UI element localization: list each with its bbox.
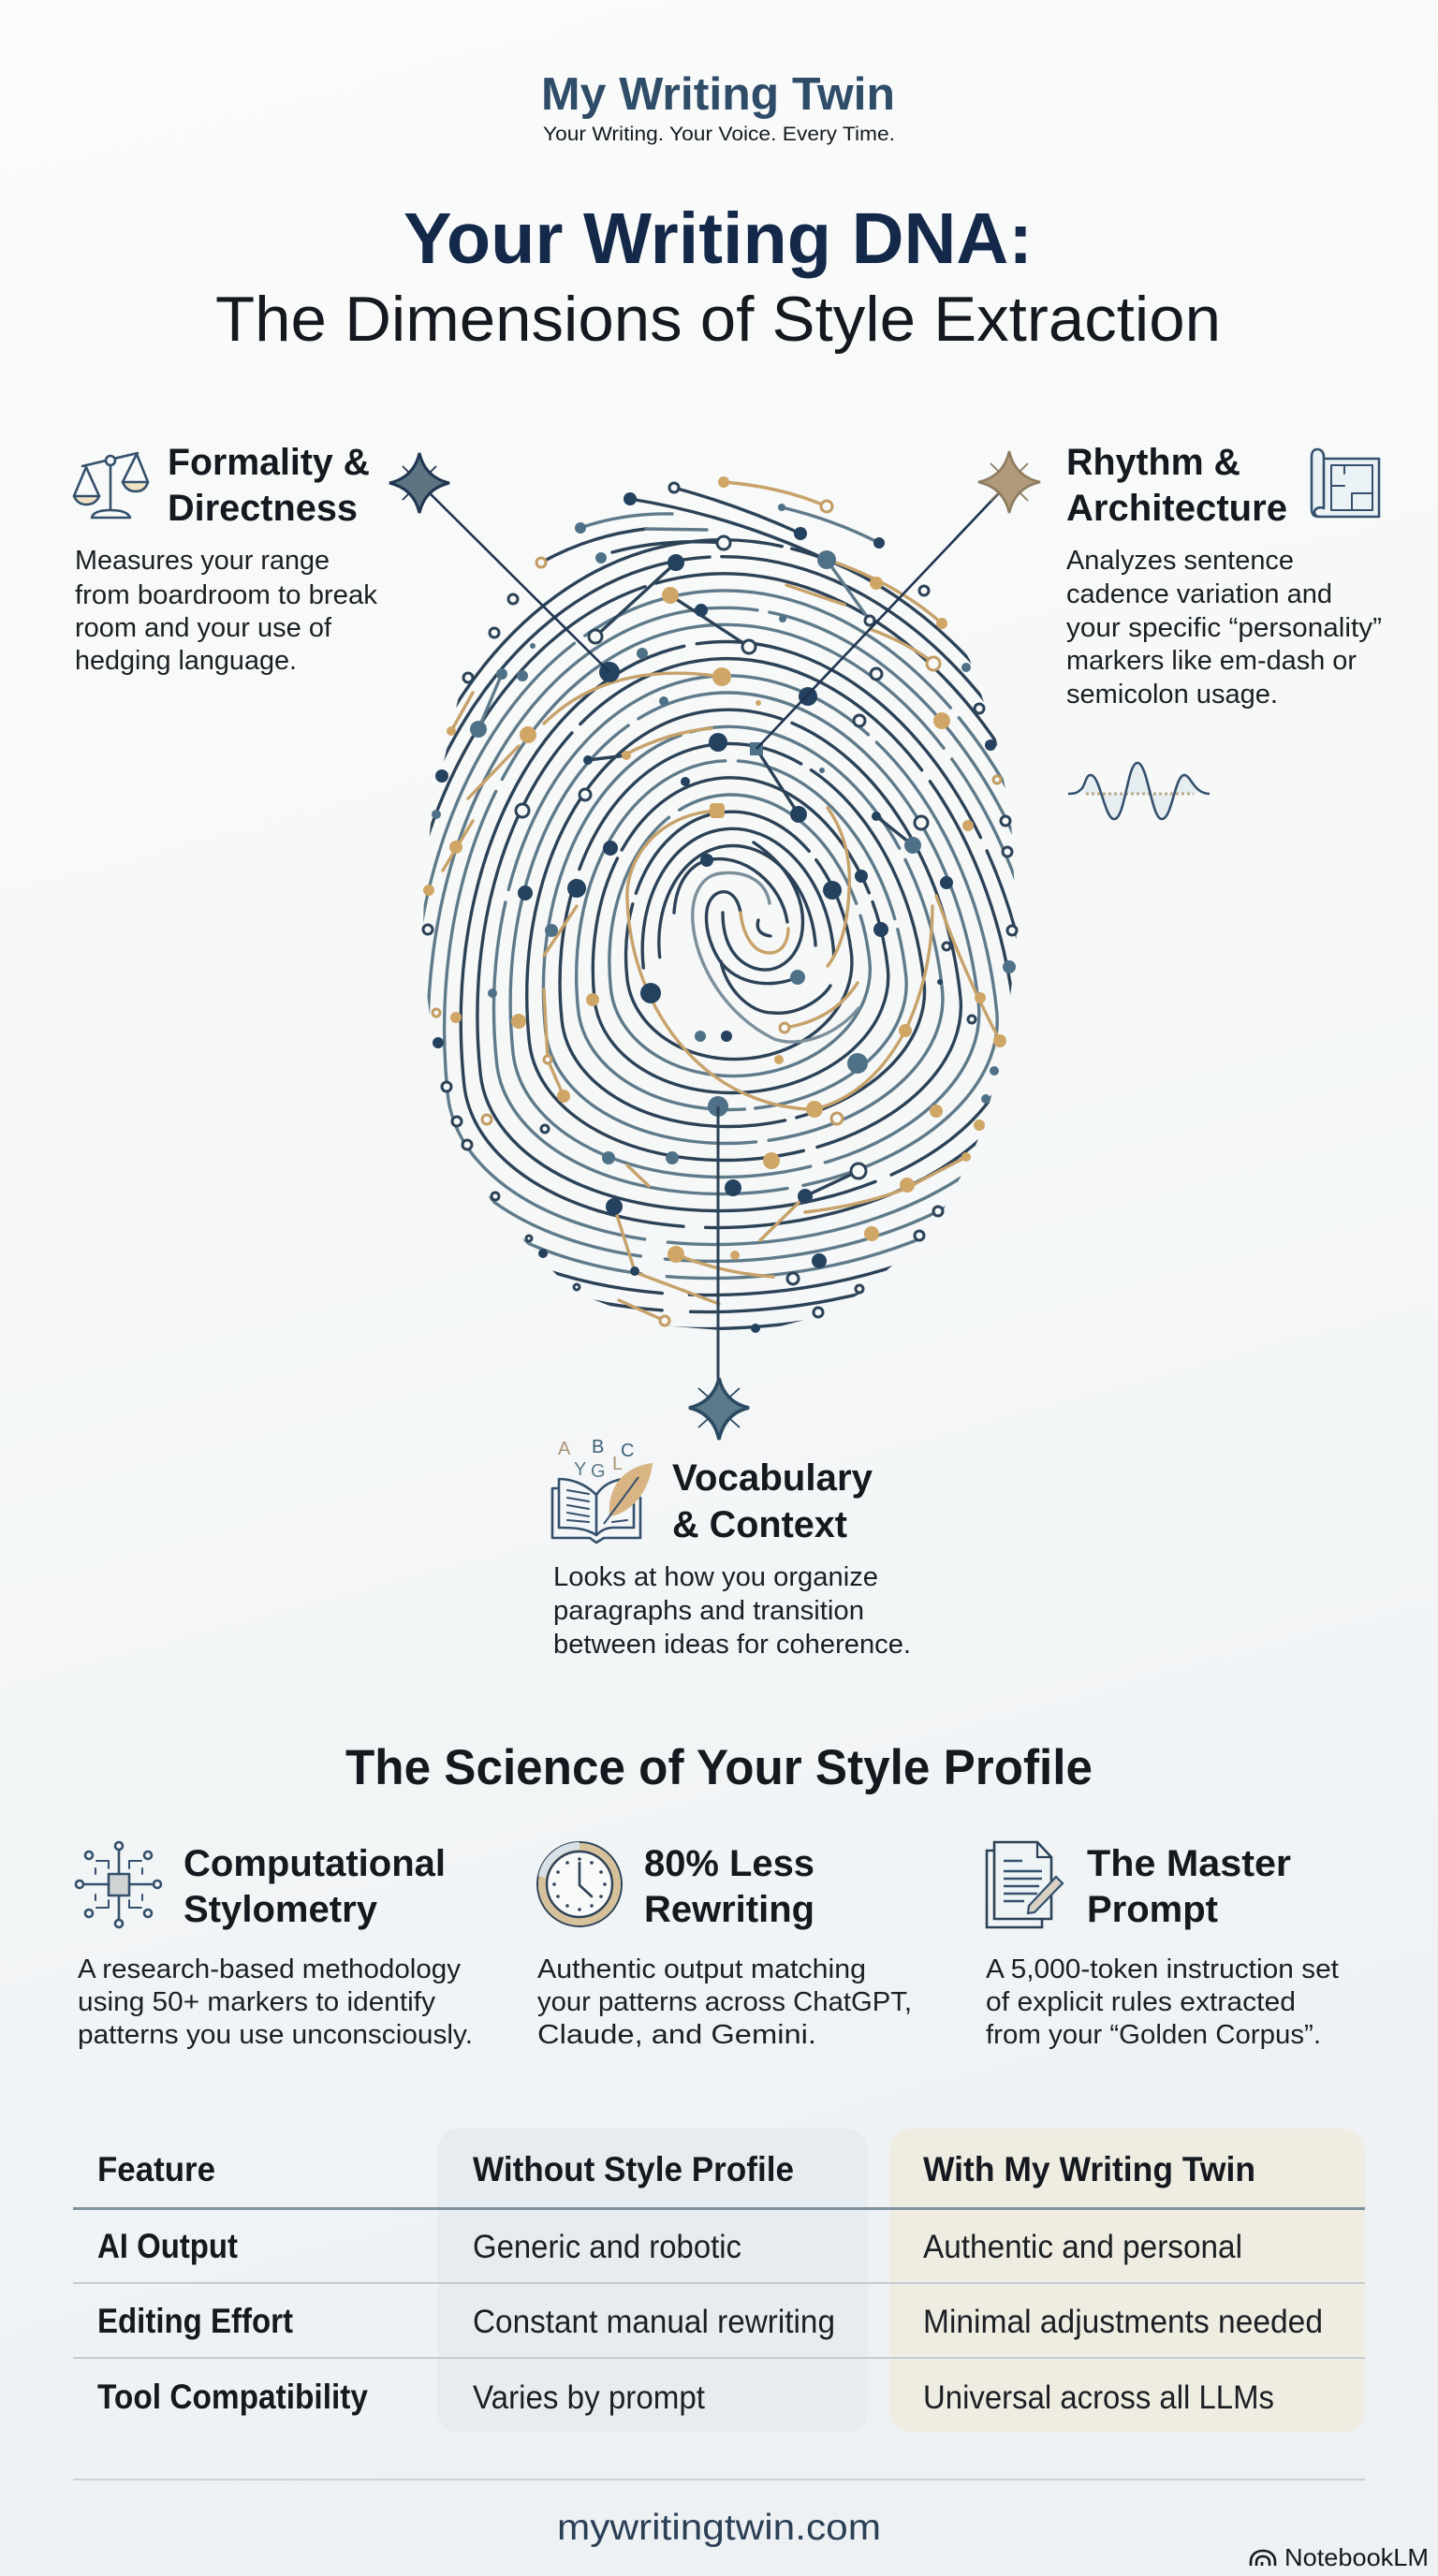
description: room and your use of (75, 613, 332, 643)
description: your specific “personality” (1066, 613, 1382, 643)
arrow: star to formality (389, 453, 609, 672)
heading: Architecture (1066, 488, 1287, 529)
panel: formality and directness (74, 442, 377, 676)
footer url: mywritingtwin.com (557, 2508, 881, 2548)
notebooklm badge: NotebookLM (1284, 2543, 1429, 2571)
icon: clock (537, 1842, 622, 1926)
column panel: with my writing twin (889, 2129, 1365, 2433)
description: Looks at how you organize (553, 1562, 878, 1592)
description: paragraphs and transition (553, 1596, 864, 1626)
icon: open book with quill and letters: L (612, 1454, 623, 1474)
description: semicolon usage. (1066, 680, 1278, 710)
heading (1087, 1843, 1291, 1930)
icon: open book with quill and letters: G (591, 1461, 606, 1482)
fingerprint nodes (423, 476, 1017, 1333)
panel: rhythm and architecture (1066, 442, 1382, 819)
row: tool compatibility: Tool Compatibility (97, 2378, 368, 2416)
section heading: The Science of Your Style Profile (345, 1740, 1093, 1795)
description: Claude, and Gemini. (537, 2020, 816, 2050)
table header row: With My Writing Twin (923, 2150, 1255, 2188)
column panel: without style profile (437, 2129, 868, 2433)
icon: waveform (1068, 763, 1210, 819)
heading: Rhythm & (1066, 442, 1240, 483)
row: editing effort: Editing Effort (97, 2302, 293, 2340)
description (75, 546, 377, 676)
description: A research-based methodology (78, 1954, 461, 1984)
heading (644, 1843, 814, 1930)
heading (168, 442, 370, 529)
table header row (97, 2150, 1255, 2188)
description: between ideas for coherence. (553, 1630, 911, 1660)
title (215, 198, 1221, 355)
row: ai output (97, 2227, 1242, 2265)
comparison table (73, 2129, 1365, 2433)
heading: Prompt (1087, 1889, 1218, 1930)
description (78, 1954, 473, 2050)
spiral core and top ridges (541, 482, 879, 1042)
heading: The Master (1087, 1843, 1291, 1884)
heading: Vocabulary (672, 1457, 873, 1499)
row: editing effort (97, 2302, 1323, 2340)
icon: open book with quill and letters: C (621, 1441, 634, 1461)
row: editing effort: Minimal adjustments needed (923, 2304, 1323, 2340)
tan ridges and connectors (443, 560, 999, 1321)
row: ai output: Generic and robotic (473, 2229, 741, 2265)
fingerprint illustration (421, 476, 1019, 1333)
description (986, 1954, 1339, 2050)
icon: open book with quill and letters: Y (574, 1459, 586, 1480)
row: tool compatibility: Varies by prompt (473, 2379, 705, 2416)
description: hedging language. (75, 646, 297, 676)
heading (672, 1457, 873, 1545)
heading (183, 1843, 446, 1930)
description: A 5,000-token instruction set (986, 1954, 1339, 1984)
table header row: Without Style Profile (473, 2150, 794, 2188)
row: tool compatibility: Universal across all LLMs (923, 2379, 1274, 2416)
title: The Dimensions of Style Extraction (215, 284, 1221, 355)
description: of explicit rules extracted (986, 1987, 1296, 2017)
description: Analyzes sentence (1066, 546, 1294, 576)
heading: Directness (168, 488, 358, 529)
row: tool compatibility (97, 2378, 1274, 2416)
panel: computational stylometry (76, 1842, 473, 2050)
panel: the master prompt (986, 1842, 1339, 2050)
description: from your “Golden Corpus”. (986, 2020, 1321, 2050)
description: using 50+ markers to identify (78, 1987, 435, 2017)
row: ai output: AI Output (97, 2227, 238, 2265)
header: brand: Your Writing. Your Voice. Every Time. (543, 124, 895, 145)
header: brand: My Writing Twin (541, 69, 895, 120)
heading: & Context (672, 1504, 847, 1545)
description: your patterns across ChatGPT, (537, 1987, 912, 2017)
icon: scales (74, 453, 148, 518)
title: Your Writing DNA: (404, 198, 1033, 279)
heading: Computational (183, 1843, 446, 1884)
heading (1066, 442, 1287, 529)
panel: 80 percent less rewriting (537, 1842, 912, 2050)
icon: blueprint (1312, 449, 1379, 517)
description: markers like em-dash or (1066, 646, 1357, 676)
icon: open book with quill and letters: A (558, 1439, 571, 1459)
table header row: Feature (97, 2150, 215, 2188)
icon: open book with quill and letters (552, 1437, 653, 1543)
description: cadence variation and (1066, 579, 1332, 609)
description (537, 1954, 912, 2050)
description: patterns you use unconsciously. (78, 2020, 473, 2050)
heading: Rewriting (644, 1889, 814, 1930)
arrow: star to rhythm (756, 451, 1040, 749)
description (1066, 546, 1382, 710)
header: brand (541, 69, 895, 145)
row: editing effort: Constant manual rewriting (473, 2304, 835, 2340)
icon: network chip (76, 1842, 161, 1927)
icon: document and pencil (987, 1842, 1063, 1927)
description: from boardroom to break (75, 580, 377, 610)
heading: Formality & (168, 442, 370, 483)
panel: vocabulary and context (552, 1437, 911, 1660)
row: ai output: Authentic and personal (923, 2229, 1242, 2265)
description (553, 1562, 911, 1660)
heading: 80% Less (644, 1843, 814, 1884)
icon: open book with quill and letters: B (592, 1437, 604, 1457)
description: Measures your range (75, 546, 330, 576)
arrow: star to vocabulary (689, 1106, 749, 1440)
heading: Stylometry (183, 1889, 378, 1930)
description: Authentic output matching (537, 1954, 866, 1984)
fingerprint ridges (423, 538, 1017, 1330)
